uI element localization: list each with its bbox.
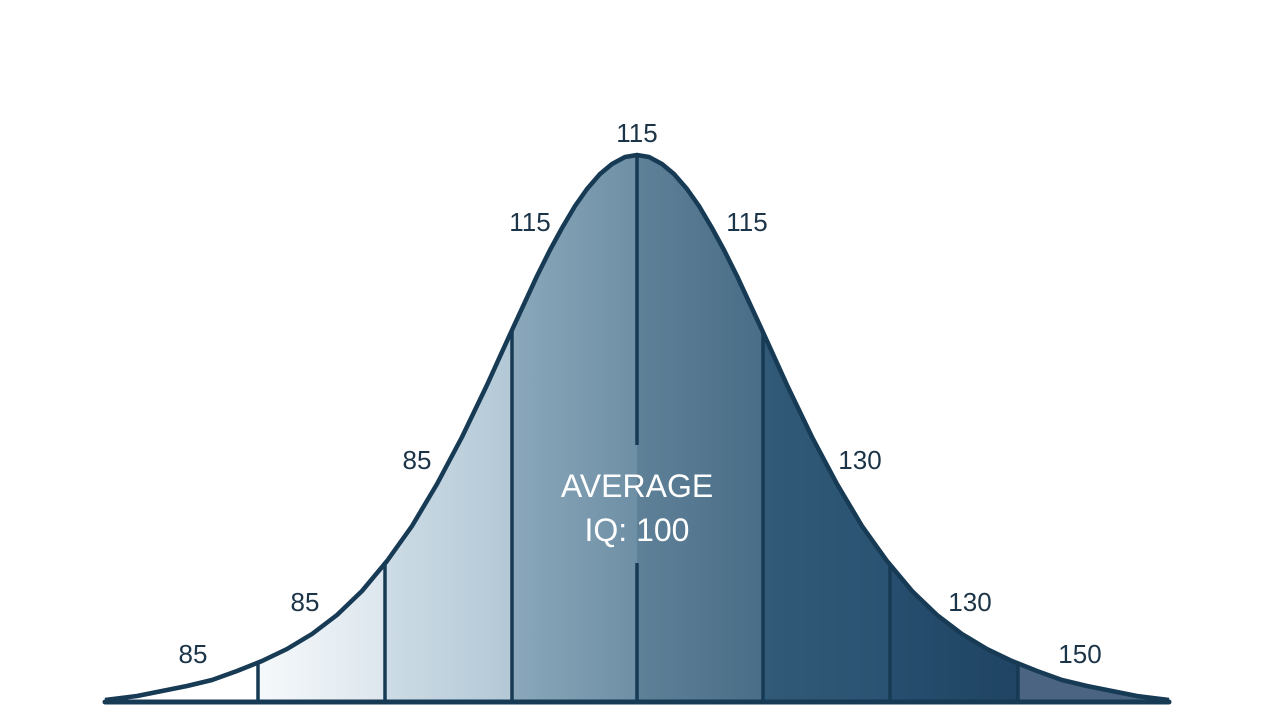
score labels: 85 (291, 587, 319, 617)
score labels: 130 (948, 587, 992, 617)
score labels: 85 (179, 639, 207, 669)
average label (561, 468, 713, 548)
score labels: 150 (1058, 639, 1102, 669)
average label: AVERAGE (561, 468, 713, 504)
score labels: 85 (403, 445, 431, 475)
bell curve chart (102, 124, 1172, 704)
curve segments fill (256, 157, 1147, 700)
average label: IQ: 100 (585, 512, 689, 548)
score labels (179, 118, 1102, 669)
curve outline (105, 155, 1169, 700)
score labels: 115 (616, 118, 658, 148)
score labels: 115 (726, 207, 768, 237)
score labels: 115 (509, 207, 551, 237)
score labels: 130 (838, 445, 882, 475)
baseline (105, 700, 1169, 704)
